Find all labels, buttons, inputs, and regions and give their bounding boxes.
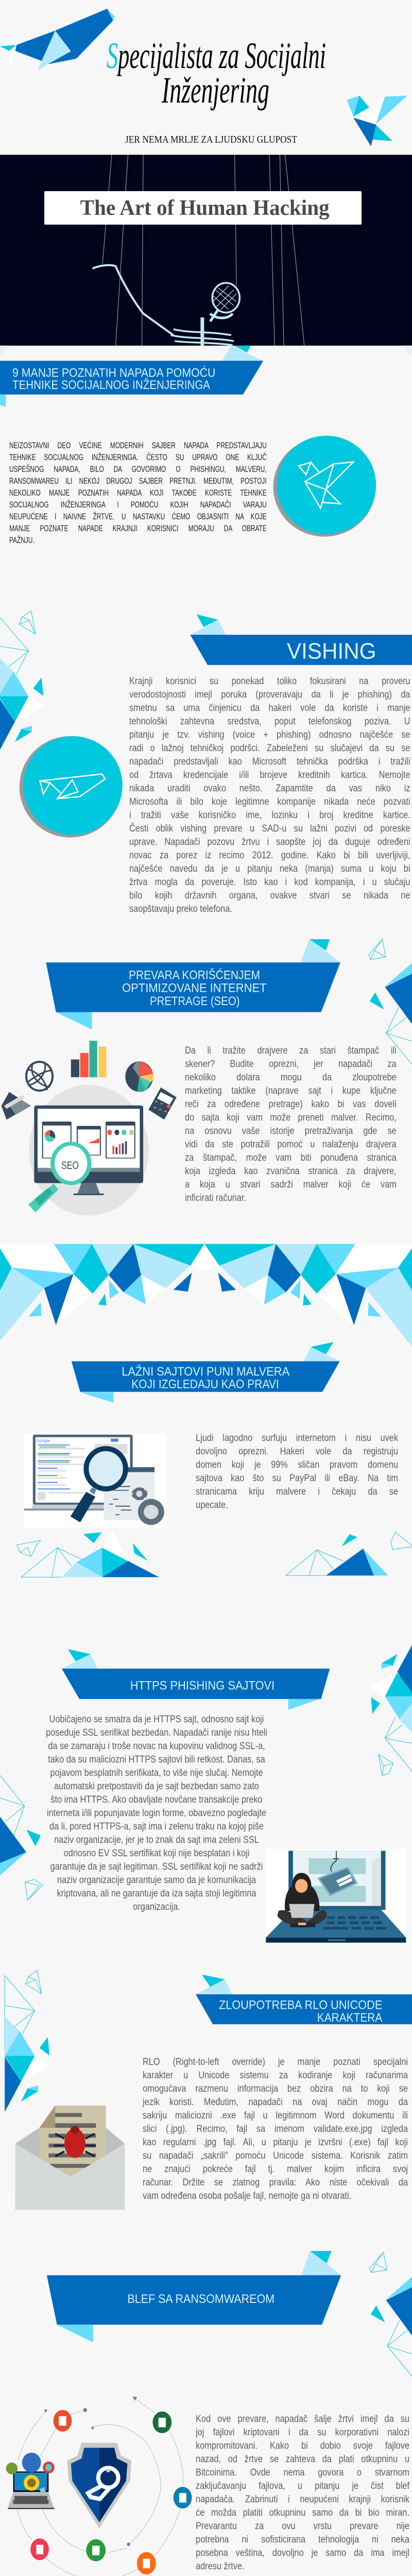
decoration: right mountains [286, 1531, 412, 1575]
text: ransomware bluff: joj fajlovi kriptovani i da su korporativni nalozi [196, 2427, 409, 2438]
banner: RLO: ZLOUPOTREBA RLO UNICODE [219, 1998, 382, 2012]
banner: SEO: OPTIMIZOVANE INTERNET [122, 981, 267, 995]
banner: 9 attacks [0, 346, 412, 406]
banner: HTTPS [62, 1649, 330, 1710]
text: HTTPS: što ima HTTPS. Ako obavljate novčane transakcije preko [50, 1794, 262, 1805]
decoration: geometric band [0, 1244, 412, 1347]
text: vishing: Microsofta ili bilo koje legitimne kompanije nikada neće pozvati [129, 796, 410, 807]
text: RLO: su napadači „sakrili" pomoću Unicode sistema. Korisnik zatim [143, 2150, 408, 2161]
text: vishing: bilo kojih državnih organa, ovakve stvari se nikada ne [129, 890, 410, 901]
text: HTTPS: naziv organizacije garantuje samo da je komunikacija [57, 1875, 256, 1886]
text: SEO: reči za određene pretrage) kako bi vas doveli [185, 1099, 396, 1110]
text: HTTPS: organizacija. [133, 1902, 180, 1912]
text: ransomware bluff: potrebna ni sofisticirana tehnologija ni neka [196, 2534, 409, 2545]
text: ransomware bluff: nazad, od žrtve se zahteva da plati otkupninu u [196, 2454, 409, 2465]
illustration: hacker on laptop [265, 1849, 406, 1943]
text: HTTPS: Uobičajeno se smatra da je HTTPS sajt, odnosno sajt koji [49, 1714, 264, 1725]
text: RLO: karakter u Unicode sistemu za kodiranje koji računarima [143, 2070, 408, 2081]
text: SEO: nekoliko dolara mogu da zloupotrebe [185, 1072, 396, 1083]
header: origami dove [347, 96, 407, 146]
text: RLO: RLO (Right-to-left override) je manje poznati specijalni [143, 2057, 408, 2067]
banner: ransomware bluff [47, 2251, 341, 2342]
text: SEO: inficirati računar. [185, 1193, 246, 1204]
text: fake sites: Ljudi lagodno surfuju internetom i nisu uvek [196, 1433, 398, 1444]
text: HTTPS: pojavom besplatnih serifikata, to više nije slučaj. Nemojte [50, 1768, 263, 1778]
text: SEO: za štampač, može vam biti ponuđena stranica [185, 1153, 396, 1163]
text: HTTPS: poseduje SSL serifikat bezbedan. Napadači ranije nisu hteli [46, 1727, 267, 1738]
text: ransomware bluff: zaključavanju fajlova, u pitanju je čist blef [196, 2481, 409, 2492]
text: fake sites: domen koji je 99% sličan pravom domenu [196, 1460, 398, 1470]
hero title plate: The Art of Human Hacking [80, 196, 330, 220]
text: vishing: Česti oblik vishing prevare u SAD-u su lažni pozivi od poreske [129, 823, 410, 834]
banner: RLO: KARAKTERA [317, 2011, 382, 2025]
text: vishing: smetnu sa uma činjenicu da hakeri vole da koriste i manje [129, 703, 410, 714]
decoration: ransomware right shards [368, 2252, 412, 2377]
text: HTTPS: naziv organizacije, jer je to znak da sajt ima zeleni SSL [54, 1835, 259, 1845]
intro text: NEUPUĆENE I NAIVNE ŽRTVE. U NASTAVKU ĆEMO OBJASNITI NA KOJE [9, 512, 267, 521]
text: RLO: vam određena osoba pošalje fajl, nemojte ga ni otvarati. [143, 2191, 351, 2201]
banner: 9 attacks: TEHNIKE SOCIJALNOG INŽENJERINGA [12, 378, 210, 392]
banner: vishing [190, 614, 412, 665]
banner: SEO [46, 939, 340, 1029]
text: vishing [129, 676, 410, 914]
text: fake sites: sajtova kao što su PayPal ili eBay. Na tim [196, 1473, 398, 1484]
banner: RLO [196, 1975, 412, 2025]
text: RLO [142, 2057, 408, 2201]
banner: SEO: PREVARA KORIŠĆENJEM [129, 968, 260, 982]
text: SEO: a koja u stvari sadrži malver koji će vam [185, 1179, 396, 1190]
hero image: skeleton puppet [0, 155, 412, 346]
text: vishing: pitanju je tzv. vishing (voice + phishing) odnosno najčešće se [129, 730, 410, 740]
text: HTTPS: interneta i/ili popunjavate login forme, obavezno pogledajte [47, 1808, 266, 1819]
text: fake sites: upecate. [196, 1500, 228, 1511]
text: vishing: napadači predstavljali kao Microsoft tehnička podrška i tražili [129, 756, 410, 767]
text: SEO: do sajta koji vam može preneti malver. Recimo, [185, 1112, 396, 1123]
decoration: HTTPS left shards [0, 1775, 43, 1900]
text: vishing: i tražiti vaše korisničko ime, lozinku i broj kreditne kartice. [129, 810, 410, 821]
header: origami whale [0, 9, 115, 70]
text: ransomware bluff: adresu žrtve. [196, 2561, 244, 2572]
text: vishing: žrtva mogla da poveruje. Isto kao i kod kompanija, i u slučaju [129, 877, 410, 888]
text: ransomware bluff: posebna veština, dovoljno je samo da ima imejl [196, 2548, 409, 2558]
title [107, 35, 326, 111]
icon: whale circle [20, 736, 123, 838]
text: ransomware bluff: Bitcoinima. Ovde nema govora o stvarnom [196, 2467, 409, 2478]
intro text: RANSOMWAREU ILI NEKOJ DRUGOJ SAJBER PRETNJI. MEĐUTIM, POSTOJI [9, 477, 267, 486]
text: ransomware bluff: napadača. Zabrinuti i neupućeni krajnji korisnik [196, 2494, 409, 2505]
text: fake sites: dovoljno oprezni. Hakeri vole da registruju [196, 1446, 398, 1457]
icon: dove circle [273, 436, 376, 537]
banner: fake sites [72, 1342, 340, 1403]
text: HTTPS [46, 1714, 267, 1912]
text: ransomware bluff: će možda platiti otkupninu samo da bi bio miran. [196, 2507, 409, 2518]
illustration: shield with key and file orbit [6, 2397, 192, 2576]
decoration: HTTPS right shards [369, 1645, 412, 1776]
text: vishing: verodostojnosti imejl poruka (proveravaju da li je phishing) da [129, 689, 410, 700]
text: HTTPS: garantuje da je sajt legitiman. SSL sertifikat koji ne sadrži [50, 1861, 263, 1872]
text: vishing: nikada uraditi ovako nešto. Zapamtite da vas niko iz [129, 783, 410, 794]
banner: SEO: PRETRAGE (SEO) [150, 994, 240, 1008]
text: vishing: novac za porez iz recimo 2012. godine. Kako bi bili uverljiviji, [129, 850, 410, 861]
text: fake sites: stranicama kriju malvere i čekaju da se [196, 1486, 398, 1497]
text: SEO: koja izgleda kao zvanična stranica za drajvere, [185, 1166, 396, 1177]
text: RLO: kao regularni .jpg fajl. Ali, u pitanju je izvršni (.exe) fajl koji [143, 2137, 408, 2148]
text: SEO: Da li tražite drajvere za stari štampač ili [185, 1045, 396, 1056]
illustration: envelope with bug [15, 2106, 125, 2210]
text: RLO: slici (.jpg). Recimo, fajl sa imenom validate.exe.jpg izgleda [143, 2124, 408, 2134]
illustration: search results under magnifier [24, 1433, 166, 1528]
text: HTTPS: da se zamaraju i troše novac na kupovinu validnog SSL-a, [48, 1741, 265, 1752]
text: RLO: ne znajući pokreće fajl tj. malver kojim inficira svoj [143, 2164, 408, 2175]
decoration: left mountains [16, 1531, 159, 1577]
text: vishing: uprave. Napadači pozovu žrtvu i saopšte joj da duguje određeni [129, 837, 410, 848]
text: vishing: saopštavaju preko telefona. [129, 904, 232, 914]
text: vishing: od žrtava kredencijale i/ili brojeve kreditnih kartica. Nemojte [129, 770, 410, 781]
text: vishing: najčešće navedu da je u pitanju neka (manja) suma u koju bi [129, 863, 410, 874]
text: vishing: tehnološki zahtevna sredstva, poput telefonskog poziva. U [129, 716, 410, 727]
text: RLO: sakriju maliciozni .exe fajl u legitimnom Word dokumentu ili [143, 2110, 408, 2121]
text: HTTPS: odnosno EV SSL sertifikat koji nije besplatan i koji [63, 1848, 249, 1859]
text: RLO: omogućava razmenu informacija bez obzira na to koji se [143, 2083, 408, 2094]
text: HTTPS: automatski pretpostaviti da je sajt bezbedan samo zato [54, 1781, 259, 1792]
text: ransomware bluff: Prevarantu za ovu vrstu prevare nije [196, 2521, 409, 2532]
decoration: RLO left shards [5, 1971, 50, 2112]
text: vishing: radi o lažnoj tehničkoj podršci. Zabeleženi su slučajevi da su se [129, 743, 410, 754]
text: SEO: marketing taktike (naprave sajt i kupe ključne [185, 1086, 396, 1096]
title: Inženjering [161, 70, 269, 111]
intro text: USPEŠNOG NAPADA, BILO DA GOVORIMO O PHISHINGU, MALVERU, [9, 465, 267, 474]
text: HTTPS: tako da su maliciozni HTTPS sajtovi bili retkost. Danas, sa [48, 1754, 265, 1765]
text: ransomware bluff [196, 2414, 410, 2572]
intro text: NEIZOSTAVNI DEO VEĆINE MODERNIH SAJBER NAPADA PREDSTAVLJAJU [9, 441, 267, 450]
text: vishing: Krajnji korisnici su ponekad toliko fokusirani na proveru [129, 676, 410, 687]
intro text [9, 440, 267, 545]
intro text: MANJE POZNATE NAPADE KRAJNJI KORISNICI MORAJU DA OBRATE [9, 524, 267, 533]
illustration: SEO monitor [2, 1041, 177, 1216]
intro text: TEHNIKE SOCIJALNOG INŽENJERINGA. ČESTO SU UPRAVO ONE KLJUČ [9, 453, 267, 462]
intro text: PAŽNJU. [9, 536, 35, 545]
text: RLO: računar. Držite se zlatnog pravila: Ako niste očekivali da [143, 2177, 408, 2188]
hero title plate [44, 191, 362, 225]
illustration: SEO monitor: SEO [61, 1160, 79, 1172]
text: HTTPS: kriptovana, ali ne garantuje da iza sajta stoji legitimna [57, 1888, 256, 1899]
banner: fake sites: KOJI IZGLEDAJU KAO PRAVI [131, 1378, 279, 1392]
text: SEO [185, 1045, 397, 1204]
banner: fake sites: LAŽNI SAJTOVI PUNI MALVERA [122, 1365, 289, 1379]
decoration: vishing left shards [0, 611, 44, 752]
banner: vishing: VISHING [287, 639, 376, 664]
text: fake sites [196, 1433, 398, 1511]
decoration: SEO right shards [367, 939, 412, 1064]
text: HTTPS: da li, pored HTTPS-a, sajt ima i zelenu traku na kojoj piše [49, 1821, 264, 1832]
banner: ransomware bluff: BLEF SA RANSOMWAREOM [127, 2292, 274, 2306]
text: RLO: jezik koristi. Međutim, napadači na ovaj način mogu da [143, 2097, 408, 2108]
text: SEO: vidi da ste potražili pomoć u nalaženju drajvera [185, 1139, 396, 1150]
banner: 9 attacks: 9 MANJE POZNATIH NAPADA POMOĆU [12, 366, 215, 380]
intro text: SOCIJALNOG INŽENJERINGA I POMOĆU KOJIH NAPADAČI VARAJU [9, 500, 267, 510]
text: ransomware bluff: kompromitovani. Kako bi dobio svoje fajlove [196, 2441, 409, 2451]
text: SEO: skener? Budite oprezni, jer napadači za [185, 1059, 396, 1070]
illustration: search results under magnifier: Google [36, 1438, 50, 1443]
subtitle: JER NEMA MRLJE ZA LJUDSKU GLUPOST [125, 134, 297, 145]
text: ransomware bluff: Kod ove prevare, napadač šalje žrtvi imejl da su [196, 2414, 409, 2425]
banner: HTTPS: HTTPS PHISHING SAJTOVI [130, 1679, 274, 1692]
intro text: NEKOLIKO MANJE POZNATIH NAPADA KOJI TAKOĐE KORISTE TEHNIKE [9, 488, 267, 498]
text: SEO: na osnovu vaše istorije pretraživanja gde se [185, 1126, 396, 1137]
